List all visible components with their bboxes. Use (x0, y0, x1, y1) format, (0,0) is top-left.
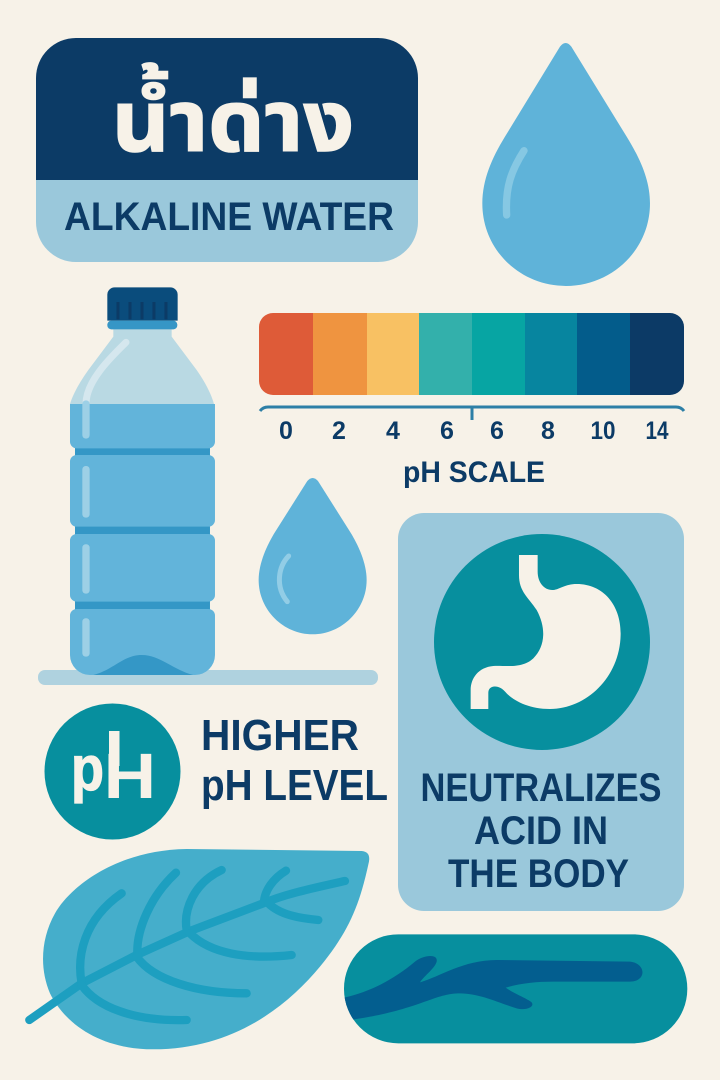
chart: pH scale (259, 313, 684, 489)
text: neutralizes: ACID IN (474, 809, 608, 853)
bottle shoulder (70, 329, 214, 404)
bottle grooves (75, 447, 210, 611)
subtitle band: light (36, 180, 418, 262)
axis labels: 14 (646, 417, 669, 445)
panel: title (36, 38, 418, 262)
text: higher pH level: HIGHER (201, 711, 359, 760)
bottle water sections (70, 404, 215, 675)
text: higher pH level: pH LEVEL (201, 761, 388, 810)
icon: stomach (434, 534, 650, 750)
icon: shelf line (38, 670, 378, 685)
icon: pH badge (44, 704, 180, 840)
text: higher pH level (201, 711, 388, 810)
text: neutralizes: THE BODY (448, 852, 629, 896)
icon: water bottle (70, 287, 215, 675)
title band: dark (36, 38, 418, 180)
icon: pH badge: H (104, 740, 156, 812)
axis labels: 2 (332, 417, 346, 445)
axis labels: 6 (490, 417, 504, 445)
chart label: pH SCALE (403, 456, 545, 489)
axis labels (279, 417, 669, 445)
colour bar (259, 313, 684, 395)
subtitle: English: ALKALINE WATER (64, 195, 394, 239)
bottle cap (107, 287, 178, 329)
panel: neutralizes acid (398, 513, 684, 911)
axis labels: 10 (590, 417, 616, 445)
icon: pH badge: p (71, 734, 104, 804)
text: neutralizes (420, 766, 662, 896)
axis labels: 4 (386, 417, 400, 445)
text: neutralizes: NEUTRALIZES (420, 766, 662, 810)
axis (260, 407, 684, 420)
icon: pill with branch (344, 934, 687, 1043)
axis labels: 6 (440, 417, 454, 445)
axis labels: 0 (279, 417, 293, 445)
icon: small water drop (259, 478, 367, 634)
icon: large water drop (482, 43, 650, 286)
axis labels: 8 (541, 417, 555, 445)
title: Thai: น้ำด่าง (112, 62, 354, 170)
bottle base notch (93, 655, 193, 675)
icon: leaf (29, 849, 369, 1049)
bottle highlights (82, 342, 126, 657)
